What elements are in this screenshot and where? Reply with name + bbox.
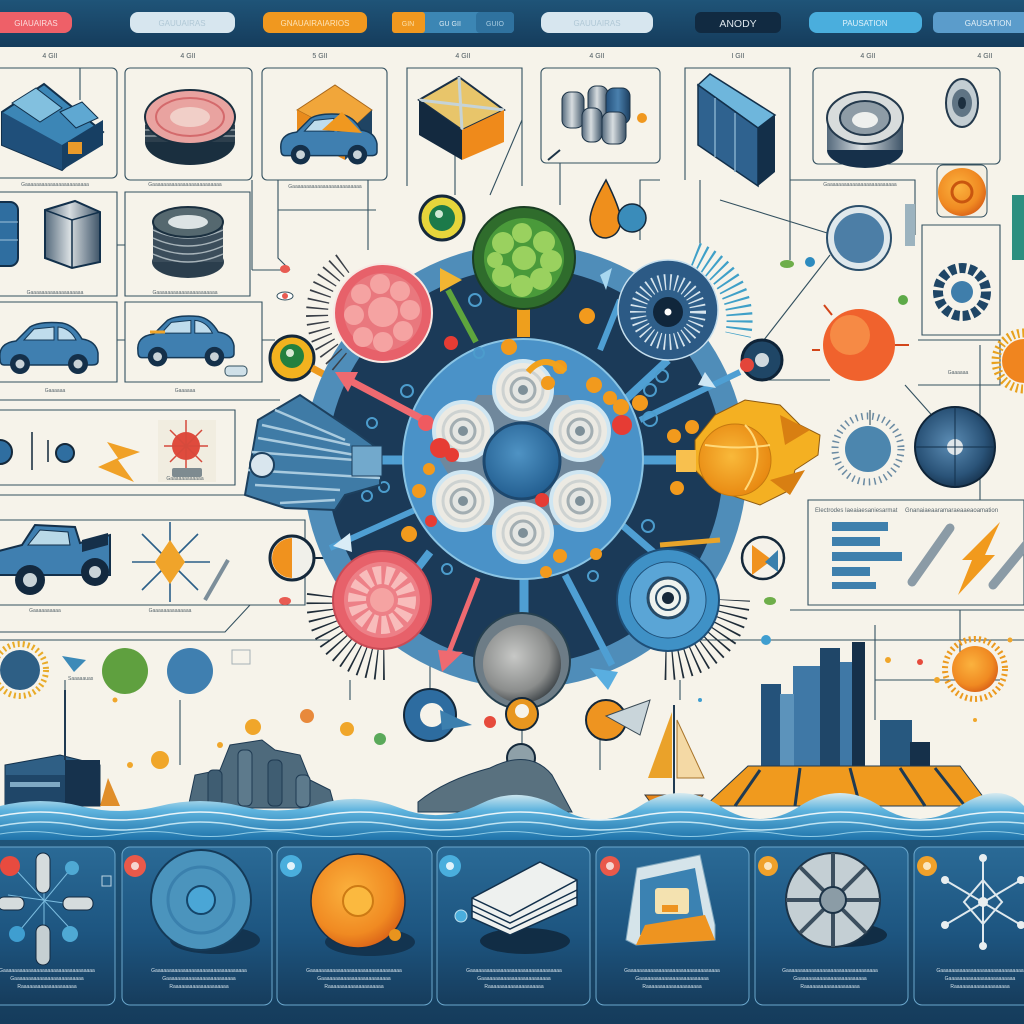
header pill: light 2: GAUUAIRAS	[573, 19, 621, 28]
column captions: I GII	[731, 53, 745, 60]
small captions in upper panels: Gaaaaaa	[45, 388, 66, 394]
coastal scene	[5, 642, 990, 812]
small grey ball	[507, 744, 535, 772]
icon: grey-blue sphere	[827, 206, 891, 270]
bristles: pink cell lower	[321, 595, 385, 665]
panel 2 caption: Raaaaaaaaaaaaaaaaaaaa	[169, 984, 229, 990]
hub: central blue ball	[484, 423, 560, 499]
satellite: mechanical cell left	[245, 395, 382, 510]
hill	[418, 759, 572, 812]
icon: metal rod	[912, 528, 950, 582]
hub: green arrow	[440, 268, 476, 342]
icon: car with orange cubes	[281, 85, 377, 164]
orange island	[705, 766, 990, 806]
panel 7 caption: Raaaaaaaaaaaaaaaaaaaa	[950, 984, 1010, 990]
icon: orange wrench	[586, 700, 650, 740]
panel 2 caption	[151, 968, 247, 990]
skyline	[761, 642, 930, 766]
rocks	[188, 740, 335, 808]
icon: blue half ring	[404, 689, 472, 741]
hub: pink arrow lower	[438, 578, 478, 672]
header pill: light: GAUUAIRAS	[158, 19, 206, 28]
panel 5 caption: Gaaaaaaaaaaaaaaaaaaaaaaaaaaaaaaaaa	[624, 968, 720, 974]
panel 6 caption	[782, 968, 878, 990]
bottom panel 5: pouch cell	[596, 847, 749, 1005]
satellite: pink cell upper	[334, 264, 432, 362]
icon: orange half ring right	[742, 537, 784, 579]
small captions in upper panels: Gaaaaaaaaaaaaaaaaaaaaaaa	[21, 182, 89, 188]
bottom panel 1: molecule	[0, 847, 115, 1005]
bristles: dark blue cell	[695, 255, 740, 335]
panel 1 caption: Raaaaaaaaaaaaaaaaaaaa	[17, 984, 77, 990]
panel 3 caption: Raaaaaaaaaaaaaaaaaaaa	[324, 984, 384, 990]
icon: star burst	[132, 522, 228, 602]
icon: green sphere	[102, 648, 148, 694]
panel 7 caption: Gaaaaaaaaaaaaaaaaaaaaaaaaaaaaaa	[936, 968, 1024, 974]
panel 1 caption: Gaaaaaaaaaaaaaaaaaaaaaaaaaaaaaaaaa	[0, 968, 95, 974]
small captions in upper panels: Gaaaaaa	[948, 370, 969, 376]
column captions: 4 GII	[589, 53, 605, 60]
panel 6 caption: Raaaaaaaaaaaaaaaaaaaa	[800, 984, 860, 990]
column captions: 4 GII	[455, 53, 471, 60]
small satellites top	[420, 165, 1024, 487]
header pill: segmented: GIN	[402, 21, 414, 28]
row icons: bolt and spark	[0, 420, 216, 482]
panel 1 caption: Gaaaaaaaaaaaaaaaaaaaaaaaaa	[10, 976, 84, 982]
water band	[0, 793, 1024, 842]
column captions: 4 GII	[977, 53, 993, 60]
panel 7 caption	[936, 968, 1024, 990]
icon: blue pickup truck	[0, 525, 110, 595]
bottom panel 3: orange sphere	[277, 847, 432, 1005]
panel 4 caption: Raaaaaaaaaaaaaaaaaaaa	[484, 984, 544, 990]
hub: spokes	[330, 300, 740, 665]
icon: side cylinder	[905, 195, 1024, 260]
small captions in upper panels: Gaaaaaaaaaaaaaaaaaaaaaa	[152, 290, 218, 296]
hub: blue arrowheads	[333, 268, 716, 690]
header pill: steel blue	[933, 12, 1024, 33]
small captions in upper panels: Gaaaaaaaaaa	[29, 608, 61, 614]
panel 4 caption: Gaaaaaaaaaaaaaaaaaaaaaaaaaaaaaaaaa	[466, 968, 562, 974]
small connector dots	[277, 257, 908, 645]
icon: green ring connector	[225, 336, 338, 382]
icon: dotted sphere	[835, 416, 901, 482]
small captions in upper panels: Gaaaaaaaaaaaaaaaaaaaaaaaaa	[823, 182, 897, 188]
caption: Saaaaauas	[68, 676, 94, 682]
harbor building	[5, 690, 120, 806]
hub: centre machinery	[440, 395, 605, 525]
icon: blue sphere	[167, 648, 213, 694]
small captions in upper panels: Gaaaaaaaaaaaa	[166, 476, 204, 482]
header pill: red	[0, 12, 72, 33]
small captions in upper panels: Gaaaaaaaaaaaaaaaaaaaaaaaaa	[148, 182, 222, 188]
icon: wire coil	[152, 207, 224, 278]
icon: cylinder cluster	[548, 86, 647, 160]
panel 3 caption: Gaaaaaaaaaaaaaaaaaaaaaaaaaaaaaaaaa	[306, 968, 402, 974]
icon: battery module block	[2, 84, 103, 170]
header pill: steel blue: GAUSATION	[965, 19, 1011, 28]
icon: orange bolt	[958, 522, 1000, 595]
bottom panel 6: spoked wheel	[755, 847, 908, 1005]
icon: orange sphere	[812, 305, 909, 381]
hub: dark ring	[327, 268, 723, 664]
icon: dark sun	[0, 644, 46, 696]
sailboat	[645, 705, 704, 810]
column captions: 4 GII	[42, 53, 58, 60]
hub: small blue rings	[362, 294, 668, 581]
panel 3 caption: Gaaaaaaaaaaaaaaaaaaaaaaaaa	[317, 976, 391, 982]
column captions	[42, 53, 993, 60]
panel 6 caption: Gaaaaaaaaaaaaaaaaaaaaaaaaaaaaaaaaa	[782, 968, 878, 974]
icon: dark gear ball	[740, 340, 782, 380]
icon: cut-off cylinder	[0, 202, 18, 266]
small captions in upper panels: Gaaaaaaaaaaaaaa	[149, 608, 192, 614]
icon: blue car	[0, 322, 98, 374]
satellite: orange fuzzy cell	[676, 400, 820, 505]
panel 2 caption: Gaaaaaaaaaaaaaaaaaaaaaaaaaaaaaaaaa	[151, 968, 247, 974]
chart heading text: Electrodes Iaeaiaesaniesarmat	[815, 508, 898, 514]
bottom panel 4: stacked sheets	[437, 847, 590, 1005]
confetti pins	[112, 638, 1012, 769]
panel 6 caption: Gaaaaaaaaaaaaaaaaaaaaaaaaa	[793, 976, 867, 982]
panel 1 caption	[0, 968, 95, 990]
hub: orange and red beads	[401, 308, 699, 578]
header pill: light	[130, 12, 235, 33]
label box	[232, 650, 250, 664]
icon: droplets	[590, 180, 646, 238]
panel 2 caption: Gaaaaaaaaaaaaaaaaaaaaaaaaa	[162, 976, 236, 982]
hub: orange stem	[517, 305, 530, 337]
left lower spheres	[0, 644, 250, 696]
panel 4 caption	[466, 968, 562, 990]
header pill: red: GIAUAIRAS	[14, 19, 58, 28]
icon: dark gear in box	[938, 268, 986, 316]
central hub diagram	[245, 207, 820, 709]
satellite: grey sphere	[474, 613, 570, 709]
connector lines and panel outlines	[0, 68, 1024, 770]
header pill: segmented: GU GII	[439, 21, 461, 28]
panel 3 caption	[306, 968, 402, 990]
header band	[0, 0, 1024, 47]
icon: small metal ring	[946, 79, 978, 127]
icon: steel cylinder	[45, 201, 100, 268]
chart heading text right: Gnanaiaeaaramaraeaaeaoamation	[905, 508, 998, 514]
column captions: 4 GII	[180, 53, 196, 60]
panel 7 caption: Gaaaaaaaaaaaaaaaaaaaaaaaa	[945, 976, 1016, 982]
arrow chevron	[62, 656, 86, 672]
bar chart	[815, 508, 1024, 595]
satellite: green cell	[473, 207, 575, 309]
icon: gold ring	[506, 698, 538, 730]
small captions in upper panels	[21, 182, 969, 614]
panel 4 caption: Gaaaaaaaaaaaaaaaaaaaaaaaaa	[477, 976, 551, 982]
icon: half orange ring	[270, 536, 325, 580]
header pill: blue	[809, 12, 922, 33]
hub: outer ring	[303, 244, 747, 688]
icon: dark blue sphere	[915, 407, 995, 487]
icon: four-tile cube	[419, 77, 504, 160]
satellite: blue target cell	[617, 549, 719, 651]
icon: metal ring	[827, 92, 903, 168]
header pill: ANODY	[695, 12, 781, 33]
icon: orange sun edge	[996, 333, 1024, 389]
icon: orange sun right	[945, 639, 1005, 699]
panel 5 caption	[624, 968, 720, 990]
small captions in upper panels: Gaaaaaa	[175, 388, 196, 394]
column captions: 5 GII	[312, 53, 328, 60]
hub: white disc cluster	[434, 361, 609, 562]
icon: metal rod right	[993, 540, 1024, 585]
bottom band	[0, 840, 1024, 1024]
bottom panel 2: blue disc	[122, 847, 272, 1005]
hub: inner blue disc	[403, 339, 643, 579]
panel 5 caption: Raaaaaaaaaaaaaaaaaaaa	[642, 984, 702, 990]
header pill: ANODY: ANODY	[719, 18, 757, 30]
bottom panel 7: snowflake network	[914, 847, 1024, 1005]
panel 5 caption: Gaaaaaaaaaaaaaaaaaaaaaaaaa	[635, 976, 709, 982]
icon: stacked red discs	[145, 90, 235, 165]
header pill: light 2	[541, 12, 653, 33]
header pill: blue: PAUSATION	[842, 19, 888, 28]
icon: tall battery	[698, 74, 775, 186]
small captions in upper panels: Gaaaaaaaaaaaaaaaaaaaaaaaaa	[288, 184, 362, 190]
hub: pink arrow upper left	[335, 372, 434, 431]
icon: orange ring	[937, 165, 987, 217]
satellite: pink cell lower	[333, 551, 431, 649]
icon: green ring	[420, 196, 464, 240]
header pill: segmented: GUIO	[486, 21, 504, 28]
icon: dark car	[138, 316, 234, 366]
header pill: segmented	[392, 12, 514, 33]
small captions in upper panels: Gaaaaaaaaaaaaaaaaaaa	[27, 290, 84, 296]
bristles: pink cell upper left	[317, 262, 345, 362]
column captions: 4 GII	[860, 53, 876, 60]
header pill: orange	[263, 12, 367, 33]
header pill: orange: GNAUAIRAIARIOS	[281, 19, 349, 28]
bristles: blue cell lower right	[665, 600, 735, 665]
satellite: dark blue starburst	[618, 260, 718, 360]
